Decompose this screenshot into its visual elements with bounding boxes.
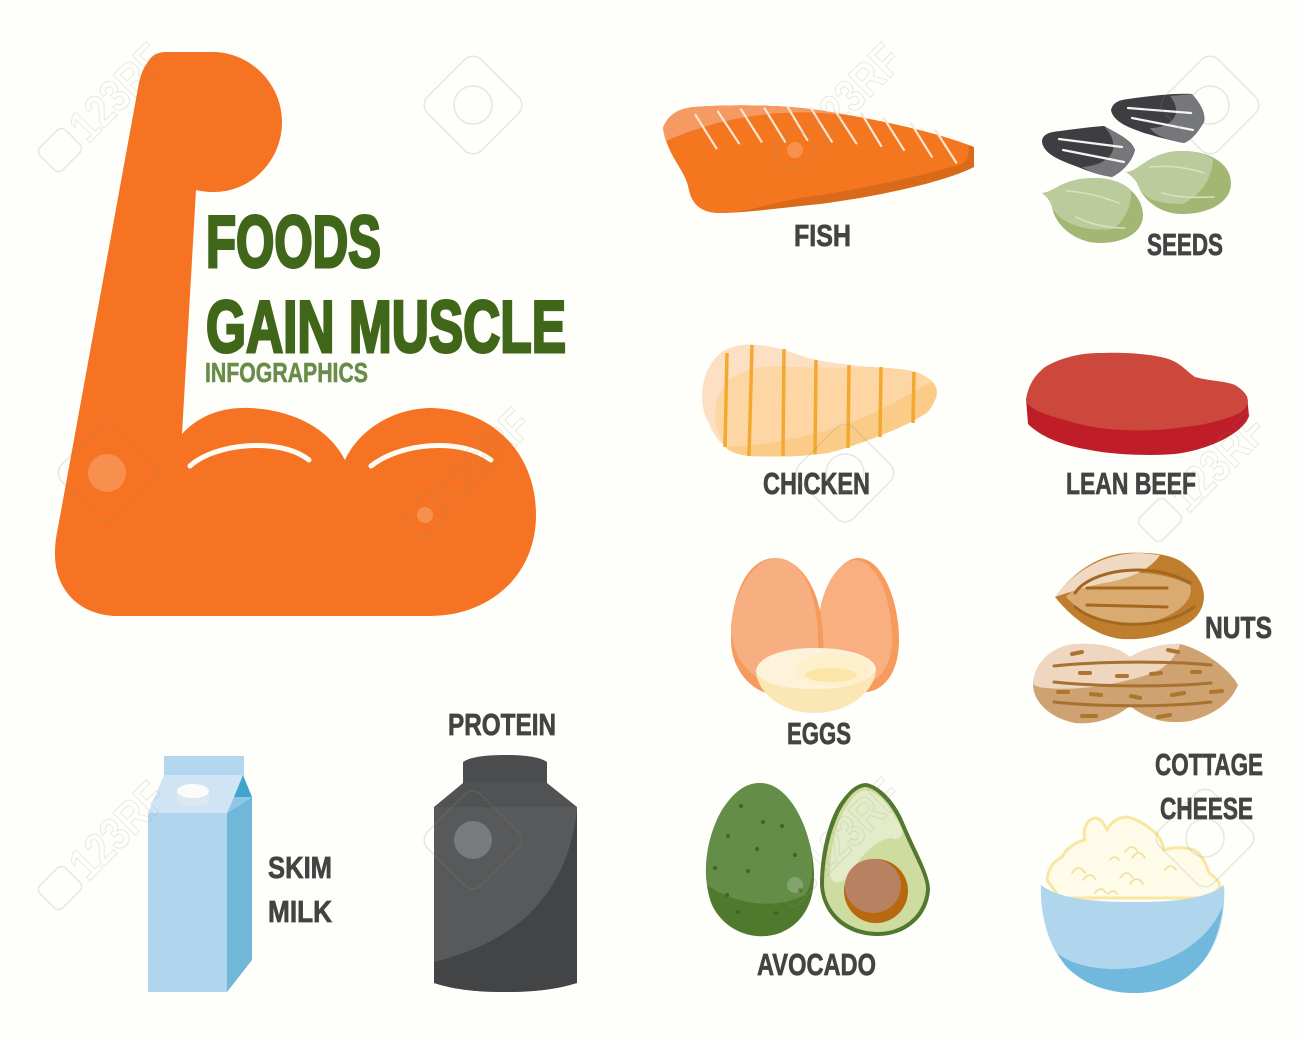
title: GAIN MUSCLE [206,287,566,368]
text: 123RF [59,33,177,151]
label: avocado: AVOCADO [757,947,876,982]
title: INFOGRAPHICS [205,357,368,388]
icon: nuts [1033,553,1238,723]
icon: protein tub [434,755,577,992]
label: skim milk: MILK [268,894,333,929]
icon: lean beef [1026,353,1249,455]
label: cottage cheese: CHEESE [1160,791,1253,826]
label: chicken: CHICKEN [763,466,870,501]
title [205,202,566,388]
label: cottage cheese: COTTAGE [1155,747,1263,782]
label: lean beef: LEAN BEEF [1066,466,1196,501]
label: eggs: EGGS [787,716,851,751]
label: seeds: SEEDS [1147,227,1223,262]
icon: avocado [706,783,930,936]
icon: milk carton [148,756,252,992]
label: skim milk [268,850,333,929]
icon: chicken breast [702,345,937,457]
label: cottage cheese [1155,747,1263,826]
label: skim milk: SKIM [268,850,332,885]
icon: eggs [731,558,899,713]
label: nuts: NUTS [1205,610,1272,645]
text: 123RF [1159,403,1277,521]
text: 123RF [794,768,912,886]
title: FOODS [206,202,381,283]
label: protein: PROTEIN [448,707,556,742]
text: 123RF [794,33,912,151]
text: 123RF [424,398,542,516]
icon: flexed muscle arm [55,52,536,616]
icon: seeds [1042,94,1231,243]
icon: cottage cheese bowl [1041,817,1224,993]
label: fish: FISH [794,218,851,253]
text: 123RF [59,771,177,889]
icon: fish fillet [663,105,974,213]
